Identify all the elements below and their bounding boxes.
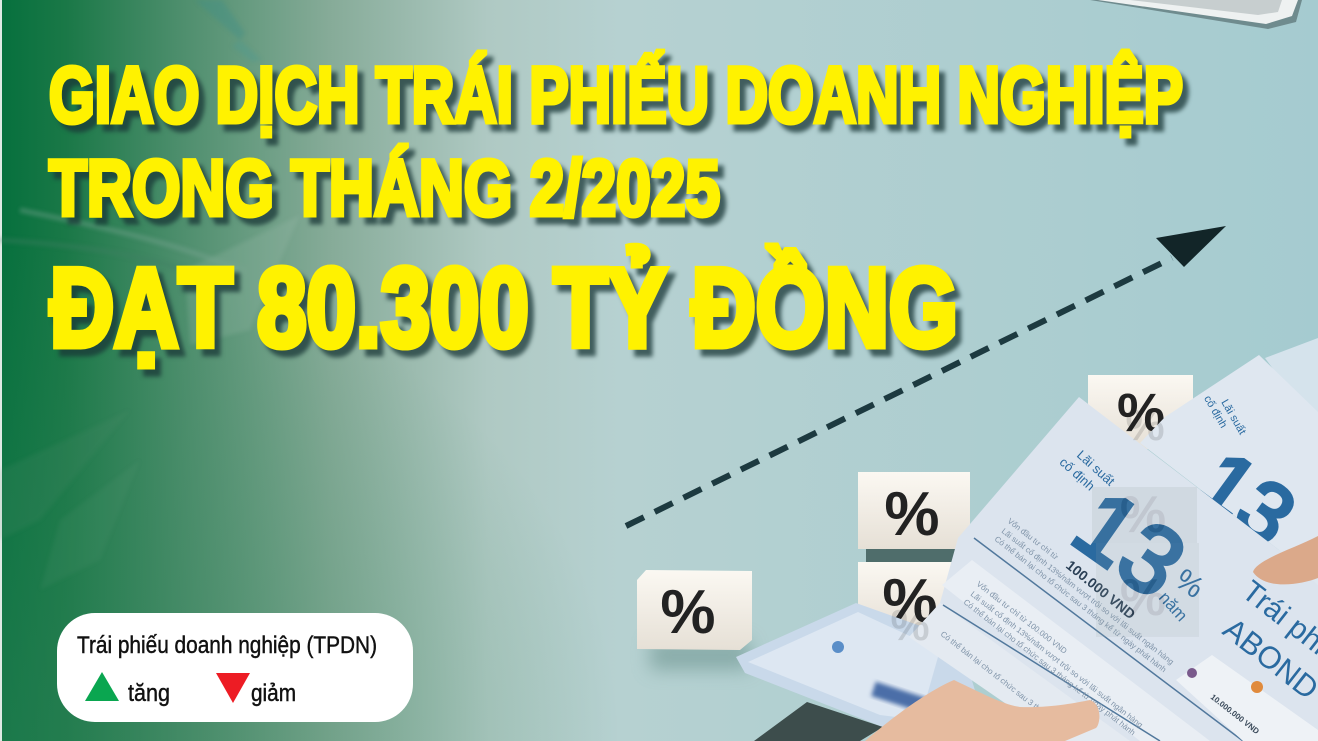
bond label: fixed rate: cố định [1057,454,1098,494]
back bond figure: 13 [1181,433,1312,563]
keyboard corner [1090,0,1302,29]
percent block: middle bottom: % [882,567,938,636]
bond body lines: Có thể bán lại cho tổ chức sau 3 tháng kể từ ngày phát hành [993,534,1168,674]
background decoration: pen and glasses [0,0,300,590]
bond body lines [939,516,1175,737]
bond body lines: Vốn đầu tư chỉ từ 100.000 VND [975,579,1069,656]
bond seal panel [1176,655,1318,741]
percent block: middle top [858,472,970,549]
title: lines 1 and 2: TRONG THÁNG 2/2025 [49,143,720,232]
bond body lines: Có thể bán lại cho tổ chức sau 3 tháng [939,629,1053,721]
translucent overlay of blocks on bonds [890,401,1199,650]
translucent overlay of blocks on bonds: % [1120,486,1166,544]
hand, bottom [865,680,1099,741]
bond body lines: Vốn đầu tư chỉ từ [1006,516,1061,562]
legend label: increase: tăng [128,680,170,707]
percent block: low: % [660,578,716,647]
bond figure: per year: năm [1155,588,1191,625]
bond figure: percent: % [1169,563,1210,605]
translucent overlay of blocks on bonds: % [1120,569,1166,627]
translucent overlay of blocks on bonds: % [1125,401,1165,450]
back bond label: Lãi suất [1218,398,1248,437]
legend heading: Trái phiếu doanh nghiệp (TPDN) [77,632,377,659]
bond body lines: Lãi suất cố định 13%/năm vượt trội so với lãi suất ngân hàng [969,589,1144,730]
icon: green up triangle [85,672,119,701]
legend label: decrease: giảm [251,680,296,707]
percent block: top: % [1117,383,1165,443]
percent block: middle top: % [884,480,940,549]
bond label: fixed rate: Lãi suất [1074,447,1118,489]
front bond sheets [909,397,1318,741]
back bond sheet, far right [1265,338,1318,430]
translucent overlay of blocks on bonds: % [890,601,930,650]
bond body lines: Có thể bán lại cho tổ chức sau 3 tháng kể từ ngày phát hành [962,597,1137,737]
title: highlight figure: ĐẠT 80.300 TỶ ĐỒNG [50,246,958,370]
hand, right [1253,536,1318,584]
percent block: low [637,570,752,670]
title: lines 1 and 2 [49,50,1183,232]
bond seal panel: 10.000.000 VND [1209,692,1261,736]
back bond sheet, middle [1140,355,1318,600]
stack of bonds, lower left [736,603,990,741]
percent block: top [1088,375,1193,449]
icon: red down triangle [216,673,250,703]
back bond label: cố định [1201,394,1229,430]
bond figure: 13: 13 [1055,470,1204,618]
bond amount: 100.000 VND [1063,557,1139,622]
legend [57,613,413,722]
percent block: middle bottom [858,549,964,636]
dashed trend arrow [626,226,1226,526]
bond body lines: Lãi suất cố định 13%/năm vượt trội so với lãi suất ngân hàng [1000,526,1175,667]
phone on desk [709,702,883,741]
